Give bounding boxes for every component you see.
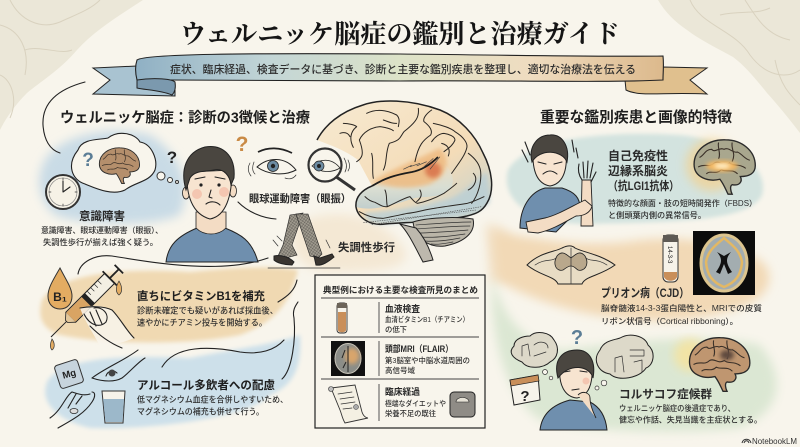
NotebookLM watermark: NotebookLM: [752, 437, 797, 446]
icon: brain with lesion: [674, 338, 750, 391]
question mark: ?: [571, 327, 583, 349]
description: 血清ビタミンB1（チアミン）: [385, 315, 469, 324]
heading: アルコール多飲者への配慮: [137, 378, 275, 392]
connector curves: [43, 82, 298, 379]
icon: syringe and hand: [44, 262, 134, 350]
description line 2: と側頭葉内側の異常信号。: [608, 210, 706, 220]
description: 脳脊髄液14-3-3蛋白陽性と、MRIでの皮質: [601, 303, 762, 313]
panel: consciousness disturbance: [41, 133, 178, 247]
description line 2: マグネシウムの補充も併せて行う。: [137, 406, 264, 416]
description line 2: 速やかにチアミン投与を開始する。: [137, 318, 267, 328]
icon: glass of water: [102, 391, 125, 423]
icon: MRI scan: [331, 341, 365, 376]
subtitle: 症状、臨床経過、検査データに基づき、診断と主要な鑑別疾患を整理し、適切な治療法を伝える: [170, 62, 636, 76]
icon: eye with nystagmus: [248, 148, 296, 179]
label: eye movement: 眼球運動障害（眼振）: [249, 192, 351, 205]
person: worried man: ?: [236, 133, 248, 156]
marbled corner: top left: [0, 0, 143, 130]
description: 診断未確定でも疑いがあれば採血後、: [137, 306, 278, 316]
icon: B1 drop: [48, 268, 72, 309]
thought cloud with brain: ?: [82, 150, 94, 171]
panel: autoimmune limbic encephalitis: [520, 135, 757, 233]
description: 意識障害、眼球運動障害（眼振）、: [41, 225, 163, 235]
description: 特徴的な顔面・肢の短時間発作（FBDS）: [608, 198, 757, 208]
heading: 辺縁系脳炎: [608, 163, 668, 178]
label: 血液検査: [385, 303, 421, 314]
description: 極端なダイエットや: [385, 399, 446, 408]
icon: limbic brain: [686, 139, 755, 194]
icon: calendar: [510, 375, 540, 405]
description: 低マグネシウム血症を合併しやすいため、: [137, 394, 288, 404]
heading: 自己免疫性: [608, 148, 668, 163]
description line 2: 高信号域: [385, 366, 416, 375]
person: thinking man: [540, 350, 607, 430]
thought cloud left: [511, 333, 557, 380]
panel: Korsakoff syndrome: [510, 327, 762, 430]
description line 2: リボン状信号（Cortical ribboning）。: [601, 316, 738, 326]
description line 2: 失調性歩行が揃えば強く疑う。: [43, 237, 158, 247]
person: worried man: [166, 133, 258, 262]
label: 頭部MRI（FLAIR）: [385, 343, 453, 354]
label: 意識障害: [79, 209, 125, 223]
row: MRI: [331, 341, 470, 376]
heading: differential: 重要な鑑別疾患と画像的特徴: [540, 108, 732, 126]
brainstem: [400, 224, 433, 262]
icon: ribboning MRI: [693, 231, 755, 295]
icon: Mg tile: [54, 359, 84, 389]
row: clinical history: [328, 385, 475, 423]
icon: big brain: [317, 101, 492, 262]
panel: alcohol drinker care: [50, 350, 288, 428]
icon: tube: [337, 303, 347, 333]
heading: Wernicke triad: ウェルニッケ脳症：診断の3徴候と治療: [60, 108, 310, 126]
icon: magnifier on eye: [308, 148, 355, 190]
heading: コルサコフ症候群: [619, 387, 713, 401]
watercolour washes: [39, 131, 777, 432]
icon: clock: [46, 175, 80, 209]
icon: 14-3-3 tube: 14-3-3: [666, 246, 672, 264]
description: 第3脳室や中脳水道周囲の: [385, 356, 470, 365]
heading: [608, 148, 679, 193]
heading: プリオン病（CJD）: [601, 286, 689, 300]
panel: prion disease: [527, 231, 762, 326]
icon: hands and pill: [50, 350, 145, 428]
icon: scroll: [328, 385, 368, 423]
marbled corner: top right: [658, 0, 800, 133]
cerebellum: [413, 218, 473, 246]
description line 2: 栄養不足の既往: [385, 409, 437, 418]
icon: B1 drop: B₁: [53, 290, 67, 304]
icon: ataxic legs: [268, 213, 340, 268]
title: ウェルニッケ脳症の鑑別と治療ガイド: [180, 14, 620, 51]
table title: 典型例における主要な検査所見のまとめ: [323, 284, 478, 295]
icon: 14-3-3 tube: [663, 235, 678, 282]
heading: （抗LGI1抗体）: [608, 178, 679, 193]
icon: weight scale: [450, 392, 475, 417]
row: blood test: [337, 303, 469, 334]
heading: 直ちにビタミンB1を補充: [137, 289, 265, 303]
icon: spinal cord cross section: [527, 246, 615, 284]
ribbon banner: [93, 54, 707, 96]
label: 臨床経過: [385, 386, 421, 397]
description: ウェルニッケ脳症の後遺症であり、: [619, 403, 735, 413]
icon: Mg tile: Mg: [61, 367, 78, 382]
thought cloud right: [595, 335, 653, 390]
question marks: ?: [167, 148, 177, 167]
label: ataxic gait: 失調性歩行: [338, 240, 395, 254]
person: grimacing man with arm spasm: [520, 135, 596, 233]
description line 2: の低下: [385, 325, 407, 334]
panel: vitamin B1: [44, 262, 278, 350]
panel: typical findings summary: [315, 275, 485, 428]
icon: calendar: ?: [520, 388, 530, 405]
description line 2: 健忘や作話、失見当識を主症状とする。: [619, 414, 762, 424]
